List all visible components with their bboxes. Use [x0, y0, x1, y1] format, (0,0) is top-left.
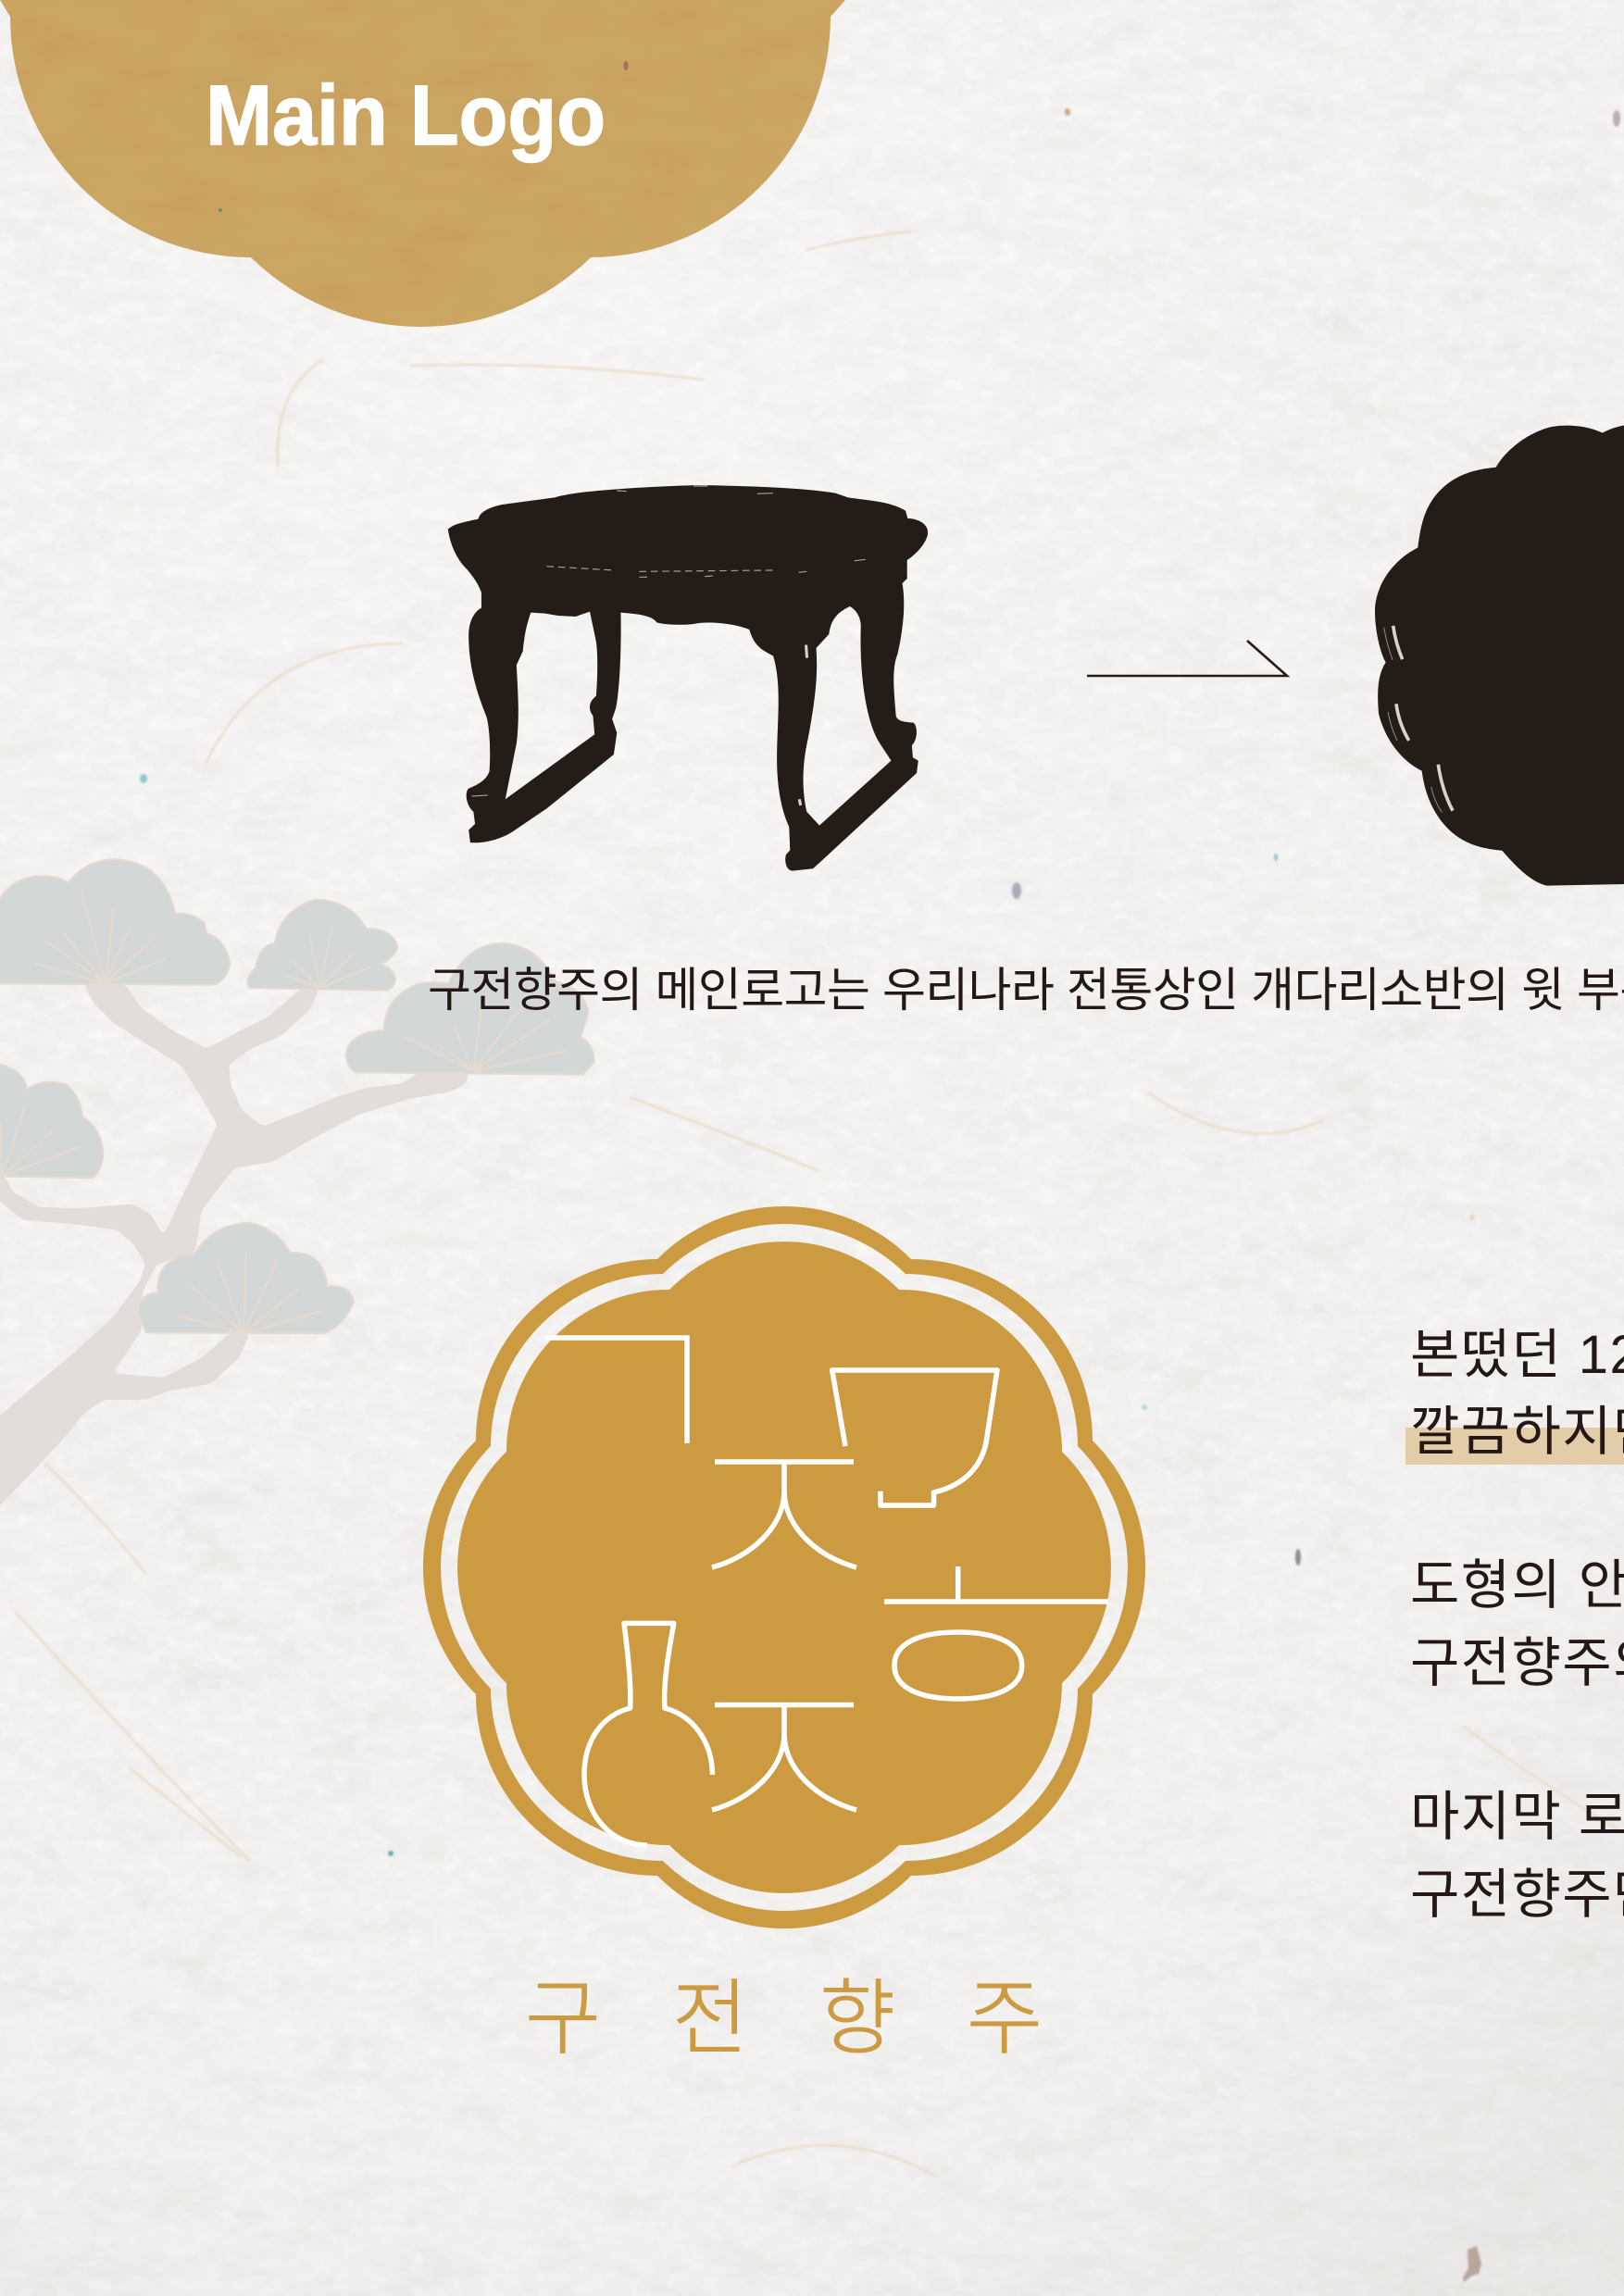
pine needles: [0, 892, 567, 1333]
tabletop highlights: [1384, 626, 1453, 812]
icon: table top silhouette: [1375, 425, 1624, 886]
emblem inner shape: [457, 1242, 1111, 1893]
emblem outer ring: [423, 1206, 1145, 1928]
brand name text: 전: [672, 1972, 748, 2065]
brand name text: 주: [967, 1972, 1043, 2065]
text: right column description: 도형의 안: [1410, 1555, 1624, 1616]
icon: gaedari soban table silhouette: [448, 485, 928, 871]
text: right column description: 마지막 로: [1410, 1787, 1624, 1847]
brand name text: 향: [819, 1972, 895, 2065]
heading banner: Main Logo: [0, 0, 861, 343]
emblem white line lettering: [545, 1338, 1108, 1845]
main logo emblem: [423, 1206, 1145, 2065]
tree trunk and branches: [0, 983, 469, 1520]
illustration: pine tree: [0, 859, 594, 1520]
arrow: [1087, 641, 1287, 676]
heading text: Main Logo: [206, 69, 606, 163]
brand name text: 구: [525, 1972, 601, 2065]
text: right column description: [1405, 1325, 1624, 1925]
highlight bar: [1405, 1428, 1624, 1465]
brand name text: [525, 1972, 1043, 2065]
pine foliage clusters: [0, 859, 594, 1333]
table highlights: [472, 486, 866, 805]
